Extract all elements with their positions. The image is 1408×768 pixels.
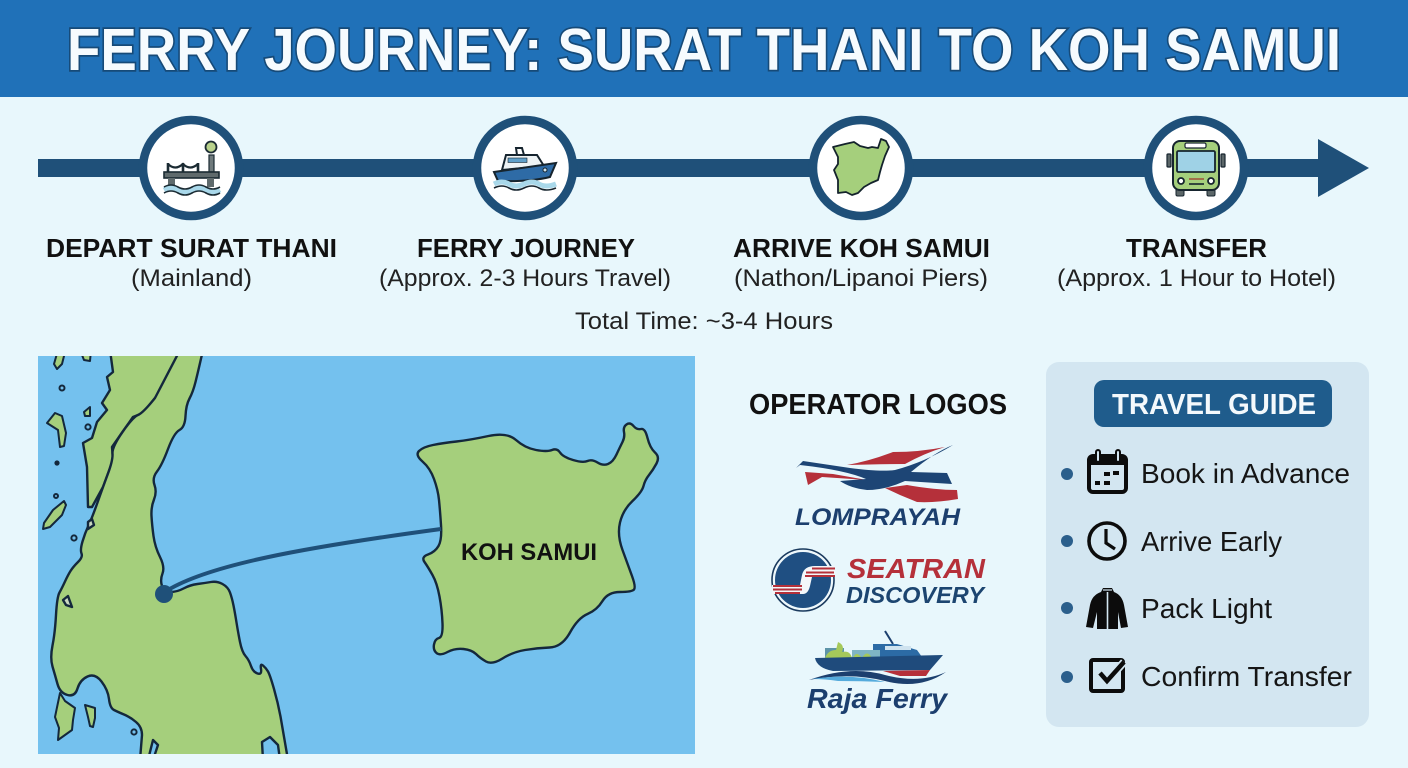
mainland <box>51 350 288 760</box>
item: arrive early <box>1061 523 1282 559</box>
step 1 label <box>46 233 337 292</box>
travel guide heading: TRAVEL GUIDE <box>1112 389 1316 421</box>
item: arrive early: Arrive Early <box>1141 526 1282 557</box>
travel guide heading <box>1094 380 1332 427</box>
operator logos heading: OPERATOR LOGOS <box>749 389 1007 421</box>
Koh Samui map label: KOH SAMUI <box>461 539 597 566</box>
step 2 label: FERRY JOURNEY <box>417 233 635 263</box>
step 2 label: (Approx. 2-3 Hours Travel) <box>379 265 671 292</box>
item: confirm transfer <box>1061 660 1352 692</box>
step 1 label: DEPART SURAT THANI <box>46 233 337 263</box>
icon: ferry <box>477 120 573 216</box>
logo: Raja Ferry: Raja Ferry <box>807 683 948 714</box>
logo: Seatran Discovery: DISCOVERY <box>846 582 987 608</box>
route map <box>38 350 695 760</box>
step 3 label: (Nathon/Lipanoi Piers) <box>734 265 988 292</box>
panel: travel guide <box>1046 362 1369 727</box>
logo: Lomprayah: LOMPRAYAH <box>795 504 961 531</box>
logo: Lomprayah <box>795 445 961 531</box>
step 4 label <box>1057 233 1336 292</box>
item: book in advance: Book in Advance <box>1141 458 1350 489</box>
logo: Seatran Discovery: SEATRAN <box>847 553 986 584</box>
step 4 label: (Approx. 1 Hour to Hotel) <box>1057 265 1336 292</box>
step 4 label: TRANSFER <box>1126 233 1267 263</box>
title: FERRY JOURNEY: SURAT THANI TO KOH SAMUI <box>67 17 1341 83</box>
islands <box>43 350 137 740</box>
item: pack light <box>1061 588 1272 629</box>
total time: Total Time: ~3-4 Hours <box>575 308 833 335</box>
icon: bus <box>1148 120 1244 216</box>
logo: Raja Ferry <box>807 631 948 714</box>
item: book in advance <box>1061 452 1350 492</box>
logo: Seatran Discovery <box>772 549 987 611</box>
step 2 label <box>379 233 671 292</box>
step 1 label: (Mainland) <box>131 265 252 292</box>
step 3 label: ARRIVE KOH SAMUI <box>733 233 990 263</box>
icon: pier <box>143 120 239 216</box>
icon: island <box>813 120 909 216</box>
departure marker <box>155 585 173 603</box>
item: confirm transfer: Confirm Transfer <box>1141 661 1352 692</box>
item: pack light: Pack Light <box>1141 593 1272 624</box>
ferry route <box>168 529 441 590</box>
title banner <box>0 0 1408 97</box>
timeline arrow <box>38 139 1369 197</box>
step 3 label <box>733 233 990 292</box>
island: Koh Samui <box>418 424 658 663</box>
